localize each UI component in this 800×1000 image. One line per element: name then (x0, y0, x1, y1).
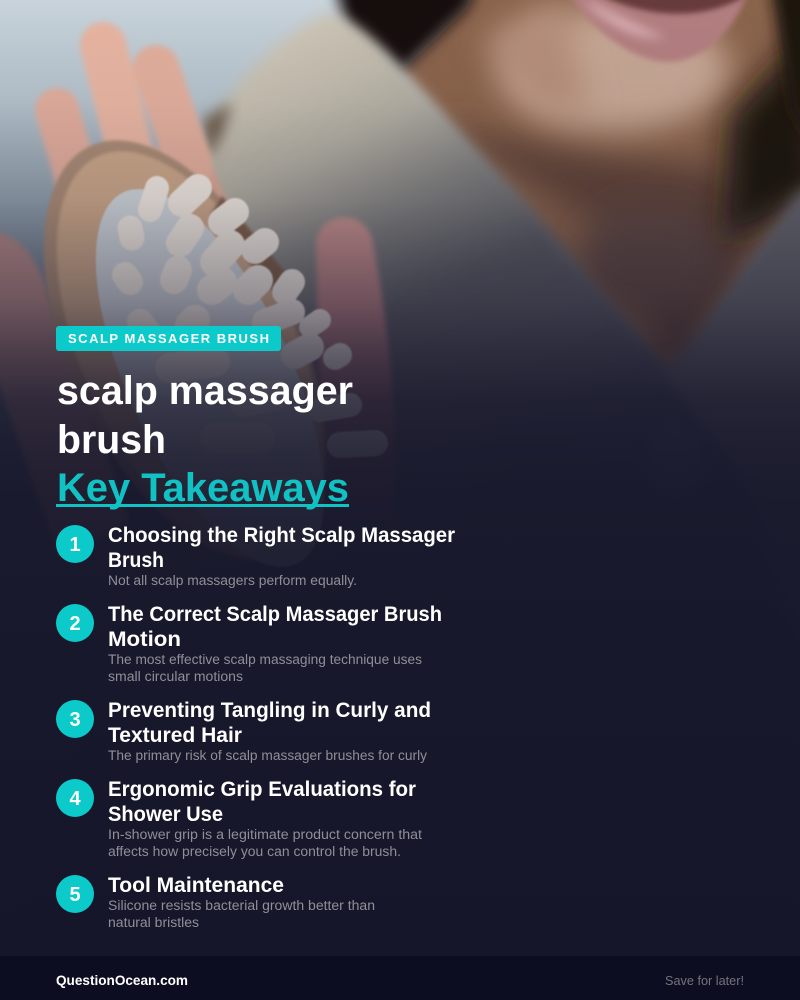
description 4 (108, 827, 422, 859)
number badge 2: 2 (69, 613, 81, 635)
number badge 3 (56, 700, 94, 738)
description 1: Not all scalp massagers perform equally. (108, 573, 357, 588)
heading 1 (108, 524, 455, 572)
takeaway 1 (56, 524, 455, 588)
takeaway 4 (56, 778, 422, 859)
description 3: The primary risk of scalp massager brushes for curly (108, 748, 427, 763)
number badge 1: 1 (69, 534, 81, 556)
category badge (56, 326, 281, 351)
title: scalp massager (57, 369, 353, 413)
heading 4: Ergonomic Grip Evaluations for (108, 778, 416, 801)
heading 2 (108, 603, 442, 651)
photo: neck and face skin (400, 0, 800, 375)
photo: brush pad (49, 158, 371, 598)
photo: right thumb (316, 217, 395, 520)
heading 3 (108, 699, 431, 747)
description 4: In-shower grip is a legitimate product concern that (108, 827, 422, 842)
number badge 3: 3 (69, 709, 81, 731)
number badge 1 (56, 525, 94, 563)
description 2: small circular motions (108, 669, 243, 684)
heading 3: Textured Hair (108, 724, 242, 747)
number badge 2 (56, 604, 94, 642)
subtitle: Key Takeaways: Key Takeaways (57, 466, 349, 510)
photo: brush wood body (0, 97, 384, 603)
heading 2: Motion (108, 628, 181, 651)
footer bar (0, 956, 800, 1000)
description 4: affects how precisely you can control the brush. (108, 844, 401, 859)
heading 1: Choosing the Right Scalp Massager (108, 524, 455, 547)
number badge 4: 4 (69, 788, 81, 810)
takeaway 5 (56, 874, 375, 930)
heading 3: Preventing Tangling in Curly and (108, 699, 431, 722)
heading 4 (108, 778, 416, 826)
description 5 (108, 898, 375, 930)
heading 4: Shower Use (108, 803, 223, 826)
footer call to action: Save for later! (665, 973, 744, 988)
photo: left hand (0, 45, 228, 560)
number badge 4 (56, 779, 94, 817)
photo: lips (568, 0, 748, 62)
takeaway 3 (56, 699, 431, 763)
description 2 (108, 652, 422, 684)
photo: hair (335, 0, 800, 180)
photo: robe fold highlight (645, 425, 705, 505)
heading 5: Tool Maintenance (108, 874, 284, 897)
description 5: Silicone resists bacterial growth better than (108, 898, 375, 913)
takeaway 2 (56, 603, 442, 684)
footer brand: QuestionOcean.com (56, 972, 188, 988)
photo: brush bristles (125, 188, 375, 495)
number badge 5 (56, 875, 94, 913)
heading 1: Brush (108, 549, 164, 572)
title: brush (57, 418, 166, 462)
heading 2: The Correct Scalp Massager Brush (108, 603, 442, 626)
category badge: SCALP MASSAGER BRUSH (68, 331, 269, 346)
description 5: natural bristles (108, 915, 199, 930)
number badge 5: 5 (69, 884, 81, 906)
description 2: The most effective scalp massaging technique uses (108, 652, 422, 667)
title (57, 369, 353, 462)
